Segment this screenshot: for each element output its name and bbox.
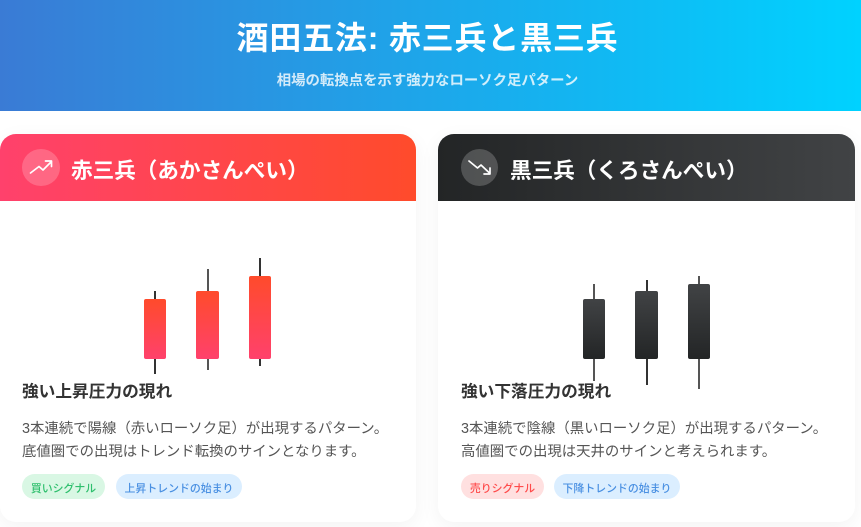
icon: trending up arrow (22, 149, 60, 186)
panel header: black (438, 134, 855, 201)
tag: downtrend start (554, 474, 680, 499)
description: 3本連続で陰線（黒いローソク足）が出現するパターン。 (461, 421, 827, 437)
title: 酒田五法: 赤三兵と黒三兵 (237, 20, 618, 56)
header banner (0, 0, 861, 111)
candlestick chart: rising red candles (144, 258, 271, 374)
panel: black three crows (438, 134, 855, 522)
description: 高値圏での出現は天井のサインと考えられます。 (461, 444, 776, 460)
tag: buy signal (22, 474, 105, 499)
candlestick chart: black candles (583, 276, 710, 389)
tag: downtrend start: 下降トレンドの始まり (563, 483, 671, 495)
tag: buy signal: 買いシグナル (31, 483, 96, 495)
description (461, 420, 827, 460)
tag: uptrend start: 上昇トレンドの始まり (125, 483, 233, 495)
panel header: red (0, 134, 416, 201)
panel heading: 黒三兵（くろさんぺい） (510, 158, 748, 183)
tag: uptrend start (116, 474, 242, 499)
subheading: 強い上昇圧力の現れ (22, 382, 172, 401)
subtitle: 相場の転換点を示す強力なローソク足パターン (277, 73, 578, 89)
tag: sell signal (461, 474, 544, 499)
description: 底値圏での出現はトレンド転換のサインとなります。 (22, 444, 366, 460)
tag: sell signal: 売りシグナル (470, 483, 535, 495)
description: 3本連続で陽線（赤いローソク足）が出現するパターン。 (22, 421, 388, 437)
panel: red three soldiers (0, 134, 416, 522)
icon: trending down arrow (461, 149, 498, 186)
panel heading: 赤三兵（あかさんぺい） (71, 158, 309, 183)
description (22, 420, 388, 460)
subheading: 強い下落圧力の現れ (461, 382, 611, 401)
